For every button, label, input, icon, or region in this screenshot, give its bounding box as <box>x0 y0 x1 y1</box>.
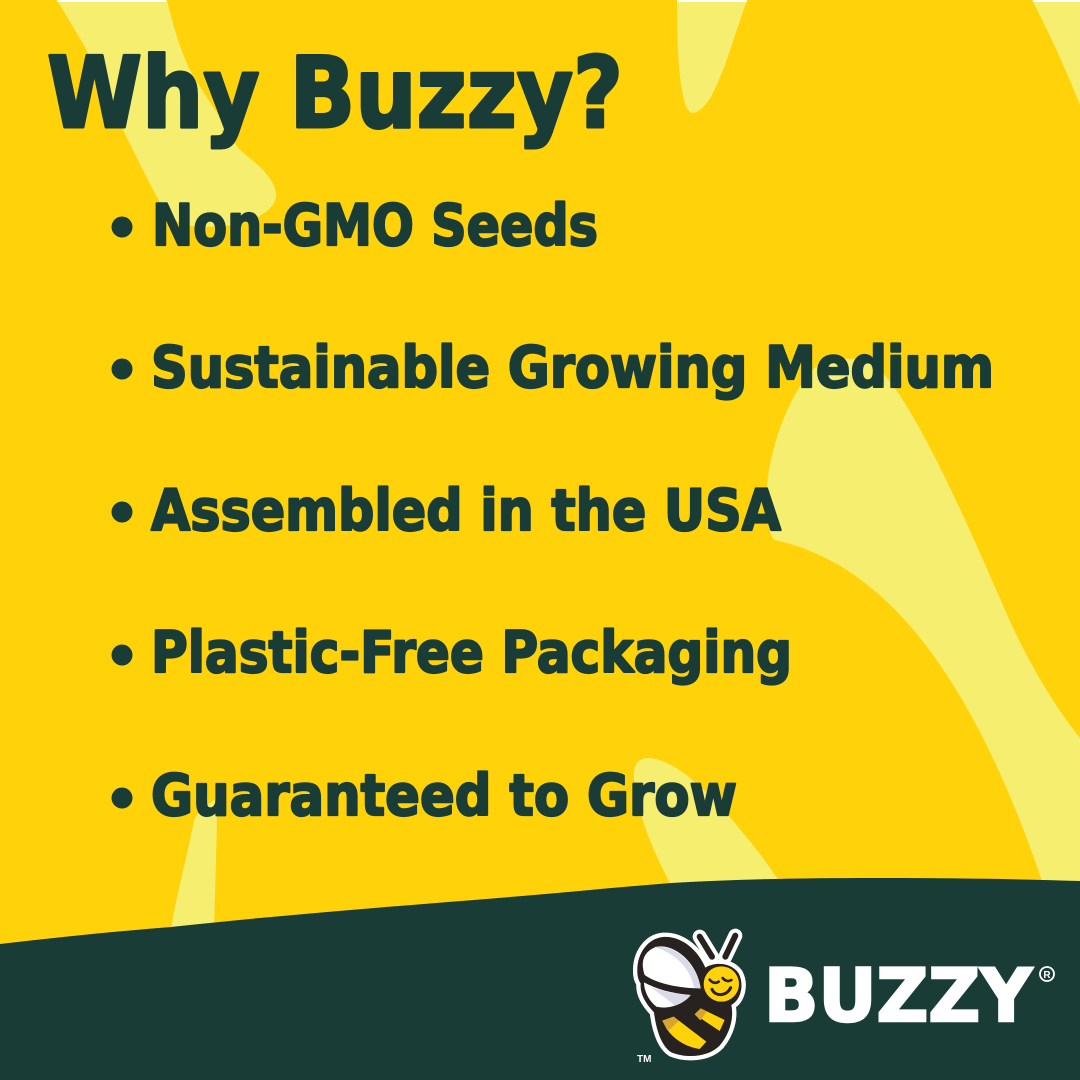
item: Sustainable Growing Medium: Sustainable Growing Medium <box>151 335 994 401</box>
logo: bee icon <box>637 936 742 1056</box>
bullet list <box>112 193 994 829</box>
logo: trademark mark: TM <box>637 1054 651 1065</box>
bee stripes <box>695 1008 725 1031</box>
bee lower wing <box>644 982 691 1008</box>
item: Assembled in the USA: Assembled in the USA <box>151 478 781 544</box>
bee upper wing <box>643 946 701 988</box>
bee face <box>704 966 739 1002</box>
item: Guaranteed to Grow: Guaranteed to Grow <box>151 763 737 829</box>
logo: registered mark: R <box>1043 970 1051 981</box>
item: Plastic-Free Packaging: Plastic-Free Packaging <box>151 620 792 686</box>
title: Why Buzzy? <box>47 37 623 151</box>
bee dark body <box>637 936 742 1056</box>
bee white outline <box>637 936 742 1056</box>
logo: registered mark <box>1040 967 1054 981</box>
item: Non-GMO Seeds: Non-GMO Seeds <box>152 193 598 259</box>
logo: BUZZY wordmark: BUZZY <box>764 954 1033 1039</box>
top white edge slivers <box>57 0 1080 2</box>
dark green wave footer <box>0 878 1080 1080</box>
